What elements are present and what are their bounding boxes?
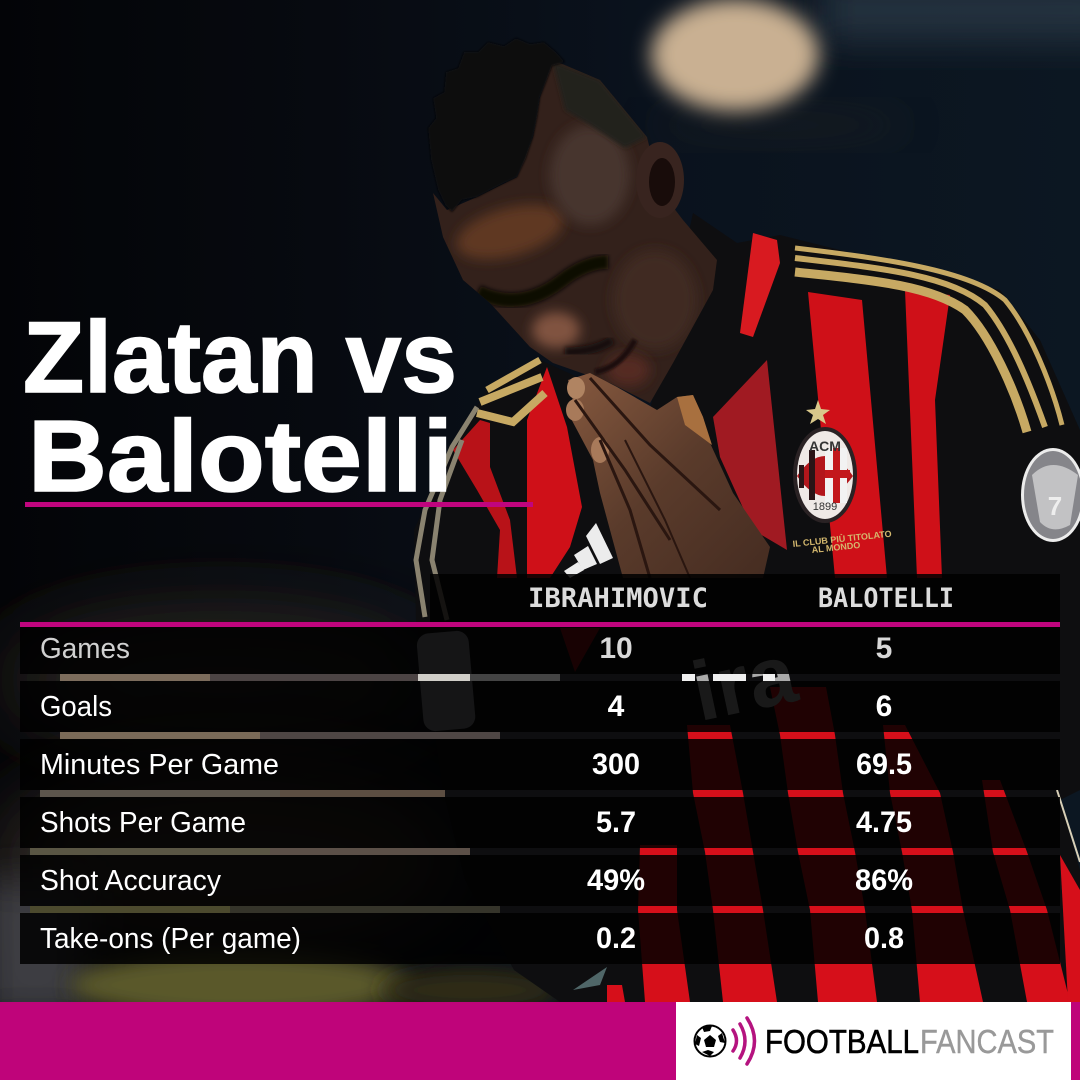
jersey: lower stripes bbox=[560, 628, 1080, 1002]
row: minutes per game: Minutes Per Game bbox=[40, 749, 279, 781]
title: Zlatan vs bbox=[23, 302, 457, 414]
jersey: side piping bbox=[416, 407, 477, 620]
arm edge highlight bbox=[1057, 790, 1080, 862]
ear bbox=[636, 142, 684, 218]
Champions League sleeve badge bbox=[1021, 448, 1080, 542]
row: goals: 4 bbox=[608, 690, 625, 723]
row: take-ons: 0.2 bbox=[596, 922, 636, 955]
row: shot accuracy: 49% bbox=[587, 864, 645, 897]
row: games: Games bbox=[40, 633, 130, 665]
row: shot accuracy bbox=[20, 855, 1060, 906]
title bbox=[23, 302, 457, 513]
jersey: wet red panel bbox=[713, 360, 787, 550]
row: take-ons bbox=[20, 913, 1060, 964]
jersey: red chest stripes bbox=[453, 233, 950, 578]
footer logo panel bbox=[676, 1002, 1071, 1080]
row: take-ons: 0.8 bbox=[864, 922, 904, 955]
adidas logo bbox=[564, 523, 613, 578]
row: shots per game bbox=[20, 797, 1060, 848]
row: shot accuracy: Shot Accuracy bbox=[40, 865, 221, 897]
hand bbox=[568, 373, 770, 578]
player: Balotelli bbox=[414, 38, 1080, 1002]
row: games bbox=[20, 627, 1060, 674]
finger lines bbox=[575, 378, 720, 578]
AC Milan crest bbox=[793, 427, 857, 523]
row: goals bbox=[20, 681, 1060, 732]
gap highlights behind the table bbox=[30, 674, 560, 913]
AC Milan crest: 1899 bbox=[813, 501, 837, 513]
icon: sound waves bbox=[733, 1018, 754, 1064]
icon: football bbox=[694, 1026, 726, 1056]
stats table bbox=[20, 574, 1060, 964]
table header: BALOTELLI bbox=[818, 583, 954, 614]
row: games: 10 bbox=[599, 632, 633, 665]
row: games: 5 bbox=[876, 632, 892, 665]
sponsor highlights in gap bbox=[682, 674, 775, 681]
Serie A sleeve patch bbox=[416, 630, 476, 732]
header rule bbox=[20, 622, 1060, 627]
row: goals: 6 bbox=[876, 690, 892, 723]
row: shots per game: Shots Per Game bbox=[40, 807, 246, 839]
title underline bbox=[25, 502, 533, 507]
face and head bbox=[433, 60, 717, 403]
wordmark bbox=[765, 1023, 1054, 1060]
Champions League sleeve badge: 7 bbox=[1048, 491, 1062, 521]
row: goals: Goals bbox=[40, 691, 112, 723]
row: minutes per game bbox=[20, 739, 1060, 790]
table header: IBRAHIMOVIC bbox=[528, 583, 708, 614]
title: Balotelli bbox=[28, 401, 453, 513]
wordmark: FANCAST bbox=[920, 1023, 1054, 1060]
jersey slogan: IL CLUB PIÙ TITOLATO bbox=[792, 528, 892, 549]
hair bbox=[428, 38, 565, 212]
footer band bbox=[0, 1002, 1080, 1080]
row: shots per game: 4.75 bbox=[856, 806, 912, 839]
wordmark: FOOTBALL bbox=[765, 1023, 919, 1060]
sponsor lettering: ira bbox=[684, 625, 805, 739]
jersey: gold shoulder stripes bbox=[477, 248, 1062, 432]
row: take-ons: Take-ons (Per game) bbox=[40, 923, 301, 955]
jersey body bbox=[414, 213, 1080, 1002]
row: shots per game: 5.7 bbox=[596, 806, 636, 839]
table header bbox=[430, 574, 1060, 622]
streaks near lower hem bbox=[573, 967, 607, 990]
thumb and fingertip highlights bbox=[566, 377, 712, 463]
row: minutes per game: 69.5 bbox=[856, 748, 912, 781]
row: minutes per game: 300 bbox=[592, 748, 640, 781]
jersey slogan: AL MONDO bbox=[811, 540, 861, 555]
row: shot accuracy: 86% bbox=[855, 864, 913, 897]
star badge bbox=[806, 400, 830, 424]
AC Milan crest: ACM bbox=[809, 438, 841, 454]
